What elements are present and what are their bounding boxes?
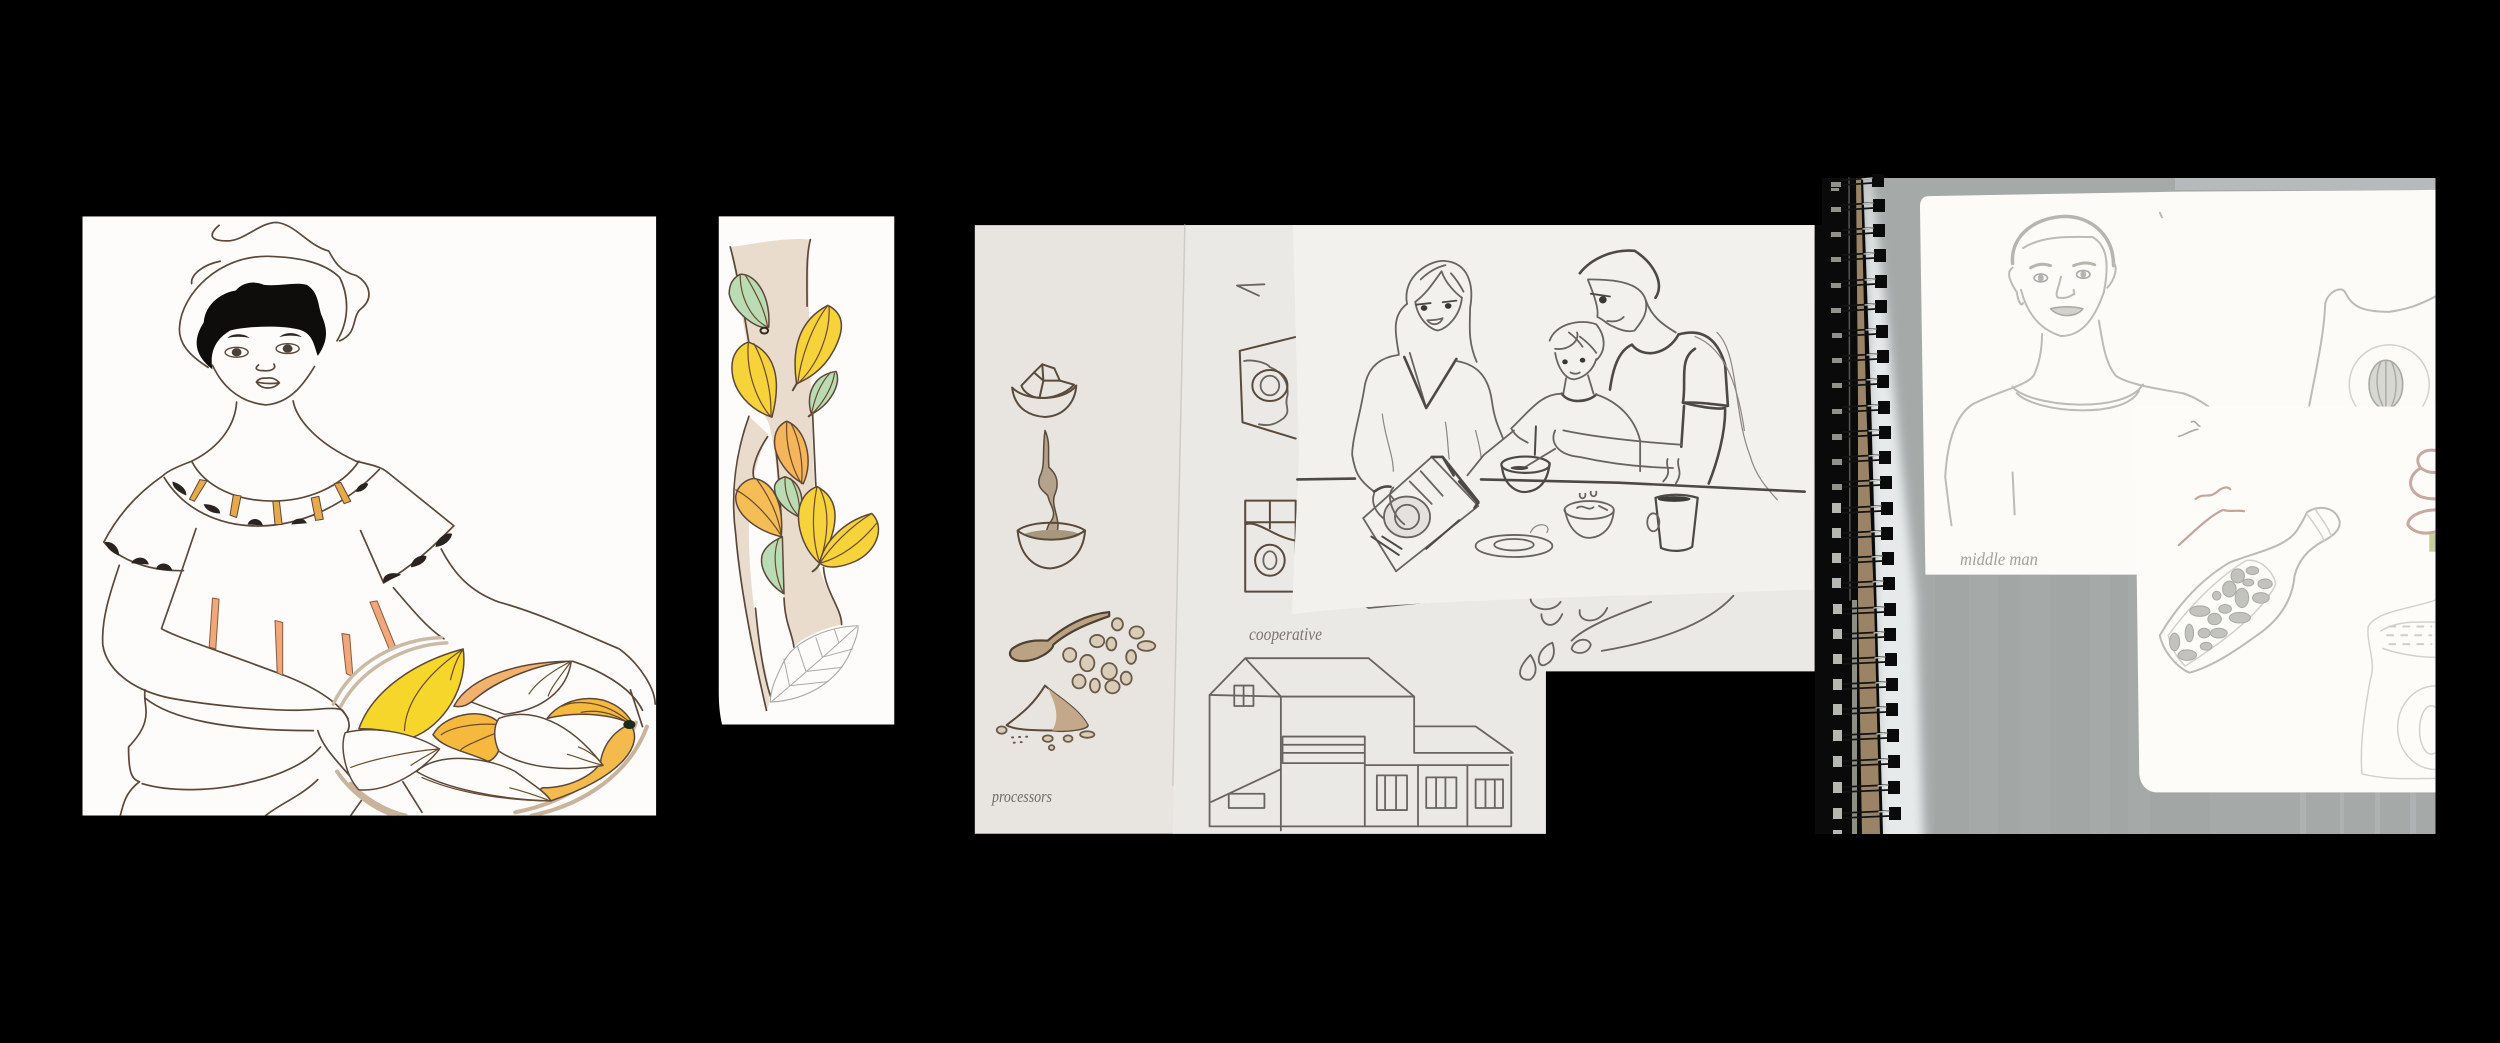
portrait [1945, 213, 2208, 525]
trunk [730, 239, 842, 710]
paper [82, 216, 656, 816]
icon: bowl of cocoa pieces [1012, 364, 1076, 417]
icon: spoon of powder [1010, 612, 1109, 661]
pods in basket [343, 649, 635, 812]
panel: spiral sketchbook [1815, 174, 2473, 850]
leaf sketch [770, 626, 858, 702]
skirt [120, 690, 362, 816]
jar sketch [2360, 599, 2436, 780]
panel: cocoa tree branch [719, 216, 894, 725]
collar trim [172, 480, 368, 525]
sleeve trim [105, 533, 452, 583]
panel: processors and cooperative sketches [975, 225, 1815, 834]
chocolate bag sketch [2308, 288, 2436, 406]
text: processors note: processors [991, 787, 1052, 806]
bowl of cocoa [1564, 492, 1614, 538]
hair [197, 283, 326, 369]
paper [719, 216, 894, 725]
sheets on the page [1920, 190, 2473, 792]
sheet: cocoa bottle and extras [2136, 406, 2436, 792]
text: cooperative note: cooperative [1249, 624, 1322, 644]
bowl with spoon [1501, 449, 1555, 492]
spiral binding [1815, 174, 1901, 834]
face [212, 333, 315, 405]
cocoa pods [729, 274, 878, 594]
headscarf [179, 222, 369, 367]
icon: cocoa beans [1063, 618, 1155, 693]
basket rim [333, 638, 647, 816]
chocolate packaging in hand [1363, 430, 1514, 571]
man [1553, 251, 1777, 500]
sheet: family preparing chocolate [1292, 225, 1815, 614]
icon: powder pile [997, 686, 1094, 750]
sheet: middle man portrait [1920, 190, 2436, 575]
sketch: hand and drops [1355, 596, 1733, 680]
sketch: chocolate bar packaging [1237, 284, 1297, 592]
woman [1352, 261, 1503, 524]
text: middle man note: middle man [1960, 549, 2038, 569]
tracing sheet [1292, 225, 1815, 614]
plate [1476, 525, 1552, 557]
arms and hands [103, 549, 655, 784]
icon: spoon pouring into bowl [1018, 430, 1085, 568]
boy [1511, 322, 1640, 471]
neck and blouse [104, 401, 454, 718]
panel: woman holding basket of cocoa pods [82, 216, 656, 816]
sketchbook page [1860, 178, 2436, 850]
base paper [975, 225, 1815, 834]
bottle of cocoa beans [2160, 508, 2340, 673]
mug [1647, 495, 1698, 551]
table edge [1297, 479, 1805, 492]
stacked items sketch [2408, 450, 2436, 552]
pencil marks [2179, 487, 2244, 545]
sketch: cooperative building [1210, 658, 1513, 830]
blouse stripes [209, 598, 396, 677]
